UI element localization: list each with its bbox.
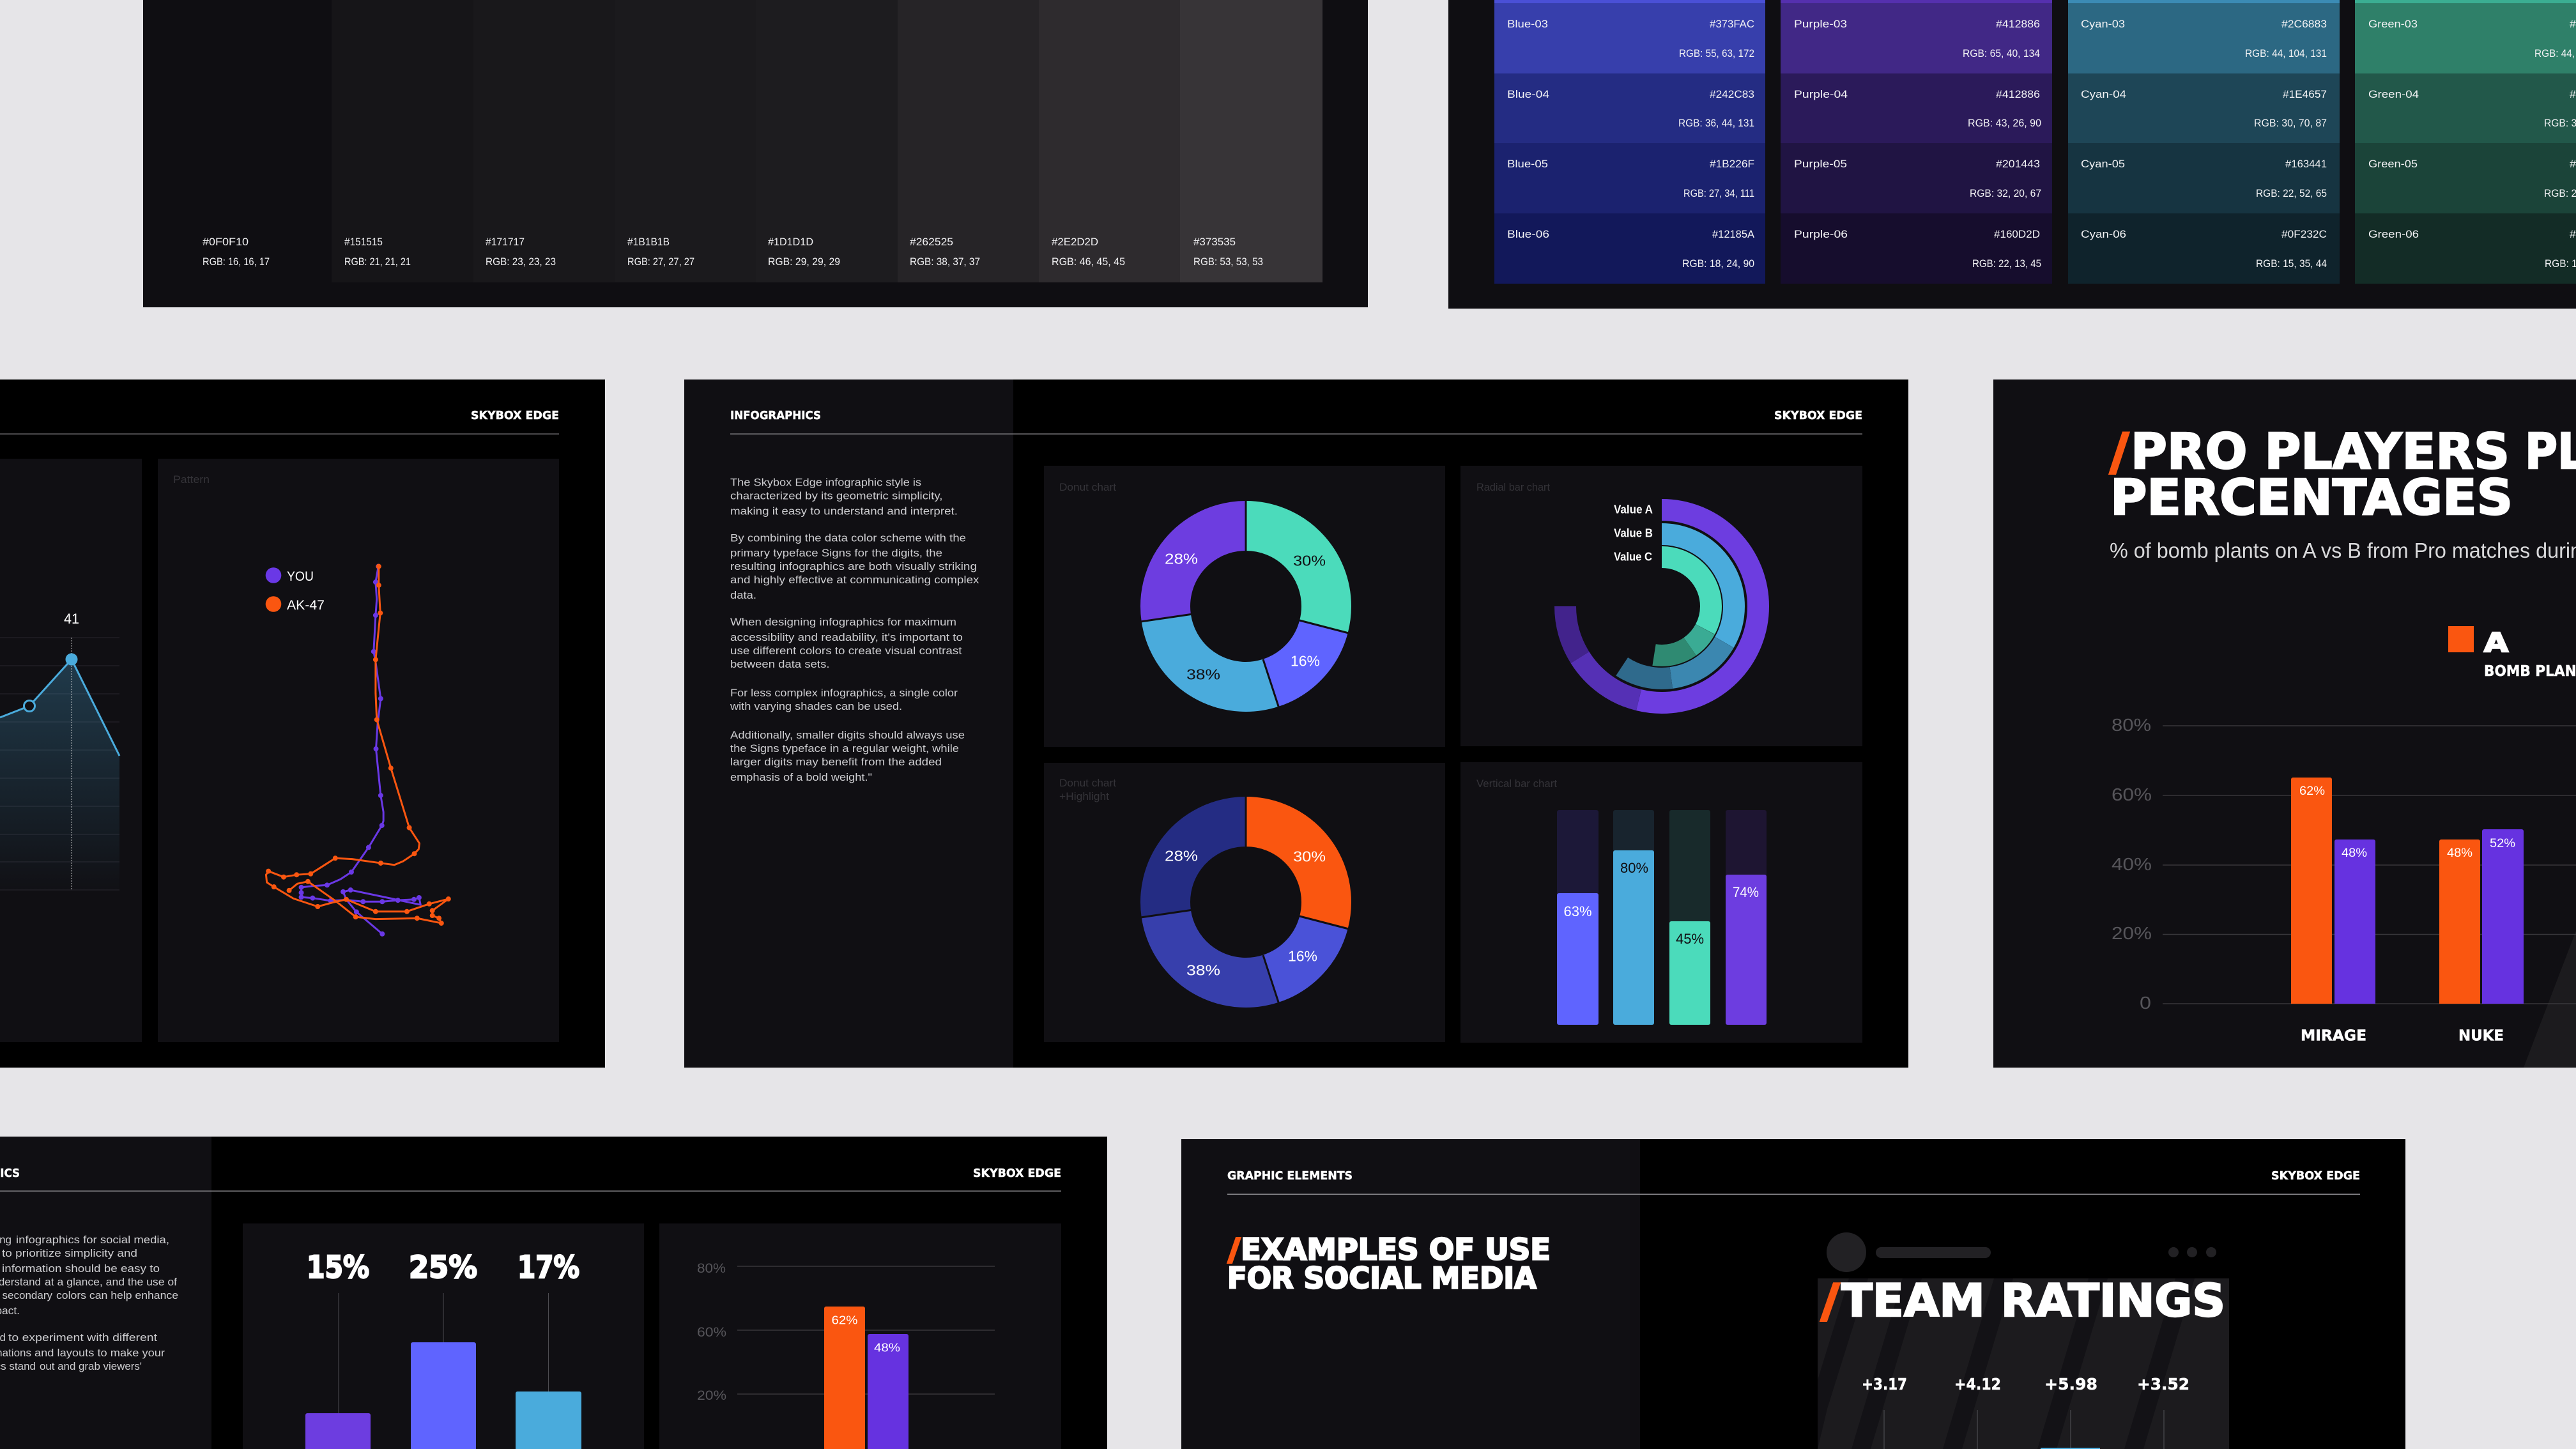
body text: out and grab viewers' (40, 1360, 142, 1372)
body text: infographics for social media, (16, 1234, 169, 1246)
column: blue shades: RGB: 18, 24, 90 (1682, 257, 1754, 270)
bar chart: 80% (2112, 715, 2151, 735)
title (2110, 424, 2576, 526)
column: blue shades: RGB: 55, 63, 172 (1679, 47, 1754, 59)
social post image: / (1821, 1275, 1839, 1328)
panel: neutral colour swatches: #2E2D2D (1052, 236, 1098, 248)
column: blue shades: RGB: 27, 34, 111 (1683, 187, 1754, 199)
card: radial bar chart (1460, 466, 1862, 746)
panel: neutral colour swatches: #1B1B1B (627, 236, 670, 248)
card: percentage bars: 60% (697, 1325, 726, 1340)
card: percentage bars: 80% (697, 1261, 726, 1276)
heading: GRAPHIC ELEMENTS (1227, 1169, 1353, 1183)
panel: neutral colour swatches: #1D1D1D (768, 236, 813, 248)
column: purple shades: #160D2D (1994, 228, 2040, 240)
column: purple shades: Purple-04 (1794, 88, 1848, 100)
column: cyan shades: Cyan-03 (2081, 18, 2125, 30)
body text: between data sets. (730, 658, 829, 670)
brand label: SKYBOX EDGE (973, 1167, 1061, 1180)
decorative corner stripe (2524, 931, 2576, 1068)
column: green shades: Green-06 (2368, 228, 2419, 240)
column: purple shades: RGB: 22, 13, 45 (1972, 257, 2041, 270)
column: blue shades: #373FAC (1710, 18, 1754, 30)
card: vertical bar chart: Vertical bar chart (1476, 778, 1557, 790)
brand label: SKYBOX EDGE (1774, 409, 1862, 422)
panel: neutral colour swatches: RGB: 46, 45, 45 (1052, 256, 1125, 268)
bar chart: 40% (2112, 854, 2152, 874)
body text: to prioritize simplicity and (2, 1247, 137, 1259)
bar chart: 52% (2490, 837, 2515, 850)
card: donut chart: 28% (1165, 551, 1198, 567)
card: vertical bar chart: 80% (1620, 860, 1648, 876)
body text (730, 477, 979, 783)
column: blue shades: Blue-06 (1507, 228, 1549, 240)
orange trajectory (266, 567, 448, 923)
purple trajectory (302, 567, 420, 934)
body text: For less complex infographics, a single color (730, 687, 958, 699)
column: purple shades: #412886 (1996, 88, 2040, 100)
panel: line chart and pattern slide (0, 379, 605, 1068)
panel: neutral colour swatches: #262525 (910, 236, 953, 248)
card: donut chart with highlight: +Highlight (1059, 790, 1109, 802)
panel: social infographics slide (0, 1137, 1107, 1449)
column: purple shades: RGB: 65, 40, 134 (1963, 47, 2040, 59)
panel: neutral colour swatches: RGB: 38, 37, 37 (910, 256, 980, 268)
panel: pro players slide (1993, 379, 2576, 1068)
card: area line chart: 41 (64, 611, 79, 627)
card: pattern chart: Pattern (173, 473, 210, 486)
bar chart: MIRAGE (2301, 1027, 2366, 1044)
body text: When designing infographics for maximum (730, 616, 956, 628)
card: radial bar chart: Value C (1614, 551, 1652, 564)
column: cyan shades (2068, 0, 2340, 284)
body text: larger digits may benefit from the added (730, 756, 942, 768)
column: green shades: Green-04 (2368, 88, 2419, 100)
card: donut chart (1044, 466, 1445, 747)
social post image: +3.17 (1862, 1375, 1907, 1393)
panel: neutral colour swatches (143, 0, 1368, 307)
card: donut chart with highlight: 30% (1293, 848, 1326, 865)
body text: and layouts to make your (34, 1347, 165, 1359)
card: vertical bar chart: 74% (1733, 884, 1759, 900)
body text: colors can help enhance (56, 1289, 178, 1301)
column: cyan shades: RGB: 15, 35, 44 (2256, 257, 2327, 270)
bar chart: 62% (2299, 785, 2325, 798)
body text: with varying shades can be used. (730, 700, 902, 712)
card: donut chart with highlight: 16% (1288, 948, 1317, 965)
social post image: TEAM RATINGS (1841, 1275, 2225, 1327)
column: purple shades: Purple-05 (1794, 158, 1847, 170)
column: cyan shades: #0F232C (2281, 228, 2327, 240)
body text: primary typeface Signs for the digits, the (730, 547, 942, 559)
column: blue shades: RGB: 36, 44, 131 (1678, 117, 1754, 129)
body text: information should be easy to (2, 1262, 160, 1275)
column: cyan shades: Cyan-04 (2081, 88, 2126, 100)
brand label: SKYBOX EDGE (2271, 1169, 2360, 1183)
title: PRO PLAYERS (2131, 424, 2510, 480)
panel: neutral colour swatches: #151515 (344, 236, 383, 248)
panel: neutral colour swatches: RGB: 21, 21, 21 (344, 256, 411, 268)
body text: to experiment with different (8, 1331, 157, 1344)
panel: graphic elements slide (1181, 1139, 2405, 1449)
panel: neutral colour swatches: RGB: 53, 53, 53 (1193, 256, 1263, 268)
column: purple shades (1781, 0, 2052, 284)
panel: neutral colour swatches: #373535 (1193, 236, 1236, 248)
column: cyan shades: RGB: 30, 70, 87 (2254, 117, 2327, 129)
column: cyan shades: Cyan-06 (2081, 228, 2126, 240)
card: donut chart: Donut chart (1059, 481, 1116, 493)
bar chart: 0 (2140, 993, 2151, 1013)
card: vertical bar chart: 45% (1676, 931, 1704, 947)
card: big number bars: 25% (409, 1250, 477, 1285)
column: blue shades (1494, 0, 1765, 284)
panel: data colour swatches (1448, 0, 2576, 309)
social post image: +5.98 (2044, 1375, 2097, 1393)
column: cyan shades: #163441 (2285, 158, 2327, 170)
card: radial bar chart: Value B (1614, 526, 1653, 539)
column: blue shades: Blue-04 (1507, 88, 1549, 100)
column: cyan shades: #1E4657 (2283, 88, 2327, 100)
card: area line chart (0, 459, 142, 1042)
panel: neutral colour swatches: RGB: 23, 23, 23 (486, 256, 556, 268)
card: percentage bars: 20% (697, 1388, 726, 1403)
panel: neutral colour swatches: RGB: 29, 29, 29 (768, 256, 840, 268)
bar chart (2112, 715, 2576, 1044)
card: donut chart: 30% (1293, 552, 1326, 569)
column: blue shades: #242C83 (1710, 88, 1754, 100)
body text: resulting infographics are both visually striking (730, 560, 977, 572)
panel: neutral colour swatches: RGB: 16, 16, 17 (203, 256, 270, 268)
card: donut chart: 16% (1291, 653, 1320, 670)
bar chart: 48% (2447, 847, 2472, 860)
legend (2448, 626, 2576, 680)
title: / (2110, 424, 2129, 481)
title: PERCENTAGES (2110, 470, 2513, 526)
body text: accessibility and readability, it's important to (730, 631, 963, 643)
body text: emphasis of a bold weight." (730, 771, 872, 783)
bar chart: 20% (2112, 923, 2152, 943)
card: donut chart: 38% (1186, 666, 1220, 682)
column: cyan shades: Cyan-05 (2081, 158, 2125, 170)
column: purple shades: RGB: 32, 20, 67 (1970, 187, 2041, 199)
column: cyan shades: RGB: 22, 52, 65 (2256, 187, 2327, 199)
legend (266, 567, 325, 613)
body text: The Skybox Edge infographic style is (730, 477, 921, 488)
column: purple shades: Purple-03 (1794, 18, 1847, 30)
card: percentage bars (659, 1223, 1061, 1449)
panel: neutral colour swatches: #0F0F10 (203, 236, 249, 248)
card: big number bars: 17% (518, 1250, 579, 1285)
column: blue shades: Blue-03 (1507, 18, 1548, 30)
column: purple shades: #201443 (1996, 158, 2040, 170)
section title: FOR SOCIAL MEDIA (1227, 1261, 1537, 1296)
column: blue shades: Blue-05 (1507, 158, 1548, 170)
legend: A (2484, 627, 2508, 658)
card: radial bar chart: Value A (1614, 503, 1653, 516)
body text: characterized by its geometric simplicity, (730, 489, 943, 502)
card: radial bar chart: Radial bar chart (1476, 481, 1550, 493)
column: purple shades: Purple-06 (1794, 228, 1848, 240)
body text: at a glance, and the use of (45, 1276, 177, 1288)
column: blue shades: #12185A (1712, 228, 1755, 240)
card: donut chart with highlight: 28% (1165, 847, 1198, 864)
card: big number bars: 15% (307, 1250, 369, 1285)
card: percentage bars: 48% (874, 1342, 900, 1354)
card: percentage bars: 62% (832, 1314, 857, 1326)
bar chart: 60% (2112, 785, 2152, 804)
card: pattern chart (158, 459, 559, 1042)
legend: YOU (287, 569, 314, 584)
column: blue shades: #1B226F (1710, 158, 1754, 170)
body text: making it easy to understand and interpret. (730, 505, 958, 518)
card: donut chart with highlight (1044, 763, 1445, 1042)
social post header mock (1827, 1232, 2216, 1272)
column: purple shades: RGB: 43, 26, 90 (1968, 117, 2041, 129)
body text (0, 1234, 178, 1372)
card: donut chart with highlight: Donut chart (1059, 777, 1116, 789)
column: green shades (2355, 0, 2576, 284)
section title: EXAMPLES OF USE (1241, 1232, 1551, 1266)
body text: use different colors to create visual contrast (730, 645, 962, 657)
card: vertical bar chart (1460, 762, 1862, 1043)
panel: neutral colour swatches: RGB: 27, 27, 27 (627, 256, 694, 268)
social post image (1818, 1275, 2229, 1449)
card: vertical bar chart: 63% (1564, 903, 1592, 919)
body text: the Signs typeface in a regular weight, while (730, 742, 959, 755)
column: purple shades: #412886 (1996, 18, 2040, 30)
panel: infographics slide (684, 379, 1908, 1068)
body text: and highly effective at communicating complex (730, 574, 979, 586)
panel: neutral colour swatches: #171717 (486, 236, 525, 248)
legend: AK-47 (287, 598, 325, 613)
body text: By combining the data color scheme with the (730, 532, 966, 544)
column: green shades: Green-03 (2368, 18, 2418, 30)
body text: data. (730, 589, 756, 601)
column: cyan shades: #2C6883 (2281, 18, 2327, 30)
brand label: SKYBOX EDGE (471, 409, 559, 422)
column: cyan shades: RGB: 44, 104, 131 (2245, 47, 2327, 59)
section title (1227, 1232, 1551, 1296)
bar chart: 48% (2342, 847, 2367, 860)
social post image: +4.12 (1954, 1375, 2001, 1393)
body text: Additionally, smaller digits should always use (730, 729, 965, 741)
card: big number bars (243, 1223, 644, 1449)
heading: INFOGRAPHICS (730, 409, 821, 422)
social post image: +3.52 (2137, 1375, 2189, 1393)
card: donut chart with highlight: 38% (1186, 962, 1220, 979)
section title: / (1228, 1232, 1241, 1268)
bar chart: NUKE (2458, 1027, 2504, 1044)
column: green shades: Green-05 (2368, 158, 2418, 170)
